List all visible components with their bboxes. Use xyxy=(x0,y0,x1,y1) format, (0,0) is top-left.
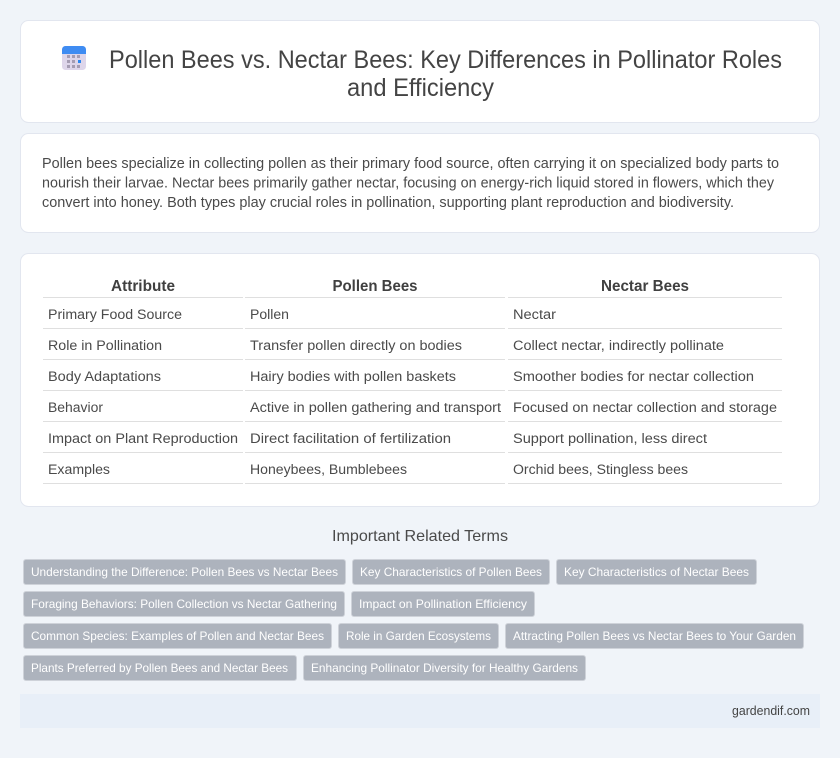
panel: comparison table xyxy=(20,254,820,506)
row: role in pollination: Transfer pollen directly on bodies xyxy=(250,338,462,354)
row: behavior: Behavior xyxy=(48,400,103,416)
table header: Attribute xyxy=(111,278,175,295)
row: role in pollination: Role in Pollination xyxy=(48,338,162,354)
row: behavior: Focused on nectar collection and storage xyxy=(513,400,777,416)
related term tags xyxy=(24,560,804,680)
text block: introduction: nourish their larvae. Nectar bees primarily gather nectar, focusing on energy-rich liquid stored in flowers, which they xyxy=(42,176,775,192)
table header: Pollen Bees xyxy=(332,278,418,295)
row: examples xyxy=(48,462,688,478)
tag: Key Characteristics of Pollen Bees xyxy=(360,565,542,579)
tag: Key Characteristics of Nectar Bees xyxy=(564,565,749,579)
tag: Plants Preferred by Pollen Bees and Nectar Bees xyxy=(31,661,288,675)
title xyxy=(109,46,782,102)
tag xyxy=(24,656,296,680)
tag: Foraging Behaviors: Pollen Collection vs Nectar Gathering xyxy=(31,597,337,611)
tag: Understanding the Difference: Pollen Bees vs Nectar Bees xyxy=(31,565,338,579)
tag: Enhancing Pollinator Diversity for Healthy Gardens xyxy=(311,661,578,675)
row: role in pollination: Collect nectar, indirectly pollinate xyxy=(513,338,724,354)
table header xyxy=(111,278,689,295)
row: impact on plant reproduction: Impact on Plant Reproduction xyxy=(48,431,238,447)
tag xyxy=(304,656,586,680)
tag: Common Species: Examples of Pollen and Nectar Bees xyxy=(31,629,324,643)
tag xyxy=(24,624,332,648)
footer: gardendif.com xyxy=(732,704,810,718)
table header: Nectar Bees xyxy=(601,278,689,295)
heading: important related terms: Important Related Terms xyxy=(332,528,508,545)
row: body adaptations: Hairy bodies with pollen baskets xyxy=(250,369,456,385)
row: primary food source xyxy=(48,307,556,323)
row: impact on plant reproduction: Direct facilitation of fertilization xyxy=(250,431,451,447)
row: body adaptations: Body Adaptations xyxy=(48,369,161,385)
row: body adaptations xyxy=(48,369,754,385)
row: behavior xyxy=(48,400,777,416)
row: role in pollination xyxy=(48,338,724,354)
row: examples: Orchid bees, Stingless bees xyxy=(513,462,688,478)
tag xyxy=(352,592,534,616)
row: body adaptations: Smoother bodies for nectar collection xyxy=(513,369,754,385)
row: behavior: Active in pollen gathering and transport xyxy=(250,400,501,416)
tag xyxy=(352,560,550,584)
row: examples: Examples xyxy=(48,462,110,478)
tag xyxy=(24,560,346,584)
title: and Efficiency xyxy=(347,74,494,102)
tag xyxy=(24,592,344,616)
text block: introduction xyxy=(42,156,779,211)
panel: title card xyxy=(20,20,820,122)
tag: Impact on Pollination Efficiency xyxy=(359,597,527,611)
row: primary food source: Primary Food Source xyxy=(48,307,182,323)
title: Pollen Bees vs. Nectar Bees: Key Differences in Pollinator Roles xyxy=(109,46,782,74)
tag: Role in Garden Ecosystems xyxy=(346,629,491,643)
tag xyxy=(338,624,498,648)
row: impact on plant reproduction: Support pollination, less direct xyxy=(513,431,707,447)
tag xyxy=(556,560,756,584)
row: examples: Honeybees, Bumblebees xyxy=(250,462,407,478)
text block: introduction: Pollen bees specialize in collecting pollen as their primary food source, often carrying it on specialized body parts to xyxy=(42,156,779,172)
row: impact on plant reproduction xyxy=(48,431,707,447)
tag: Attracting Pollen Bees vs Nectar Bees to Your Garden xyxy=(513,629,796,643)
row: primary food source: Pollen xyxy=(250,307,289,323)
panel: introduction xyxy=(20,134,820,232)
tag xyxy=(506,624,804,648)
footer xyxy=(20,694,820,728)
text block: introduction: convert into honey. Both types play crucial roles in pollination, supporting plant reproduction and biodiversity. xyxy=(42,195,734,211)
row: primary food source: Nectar xyxy=(513,307,556,323)
icon: calendar xyxy=(62,46,86,70)
